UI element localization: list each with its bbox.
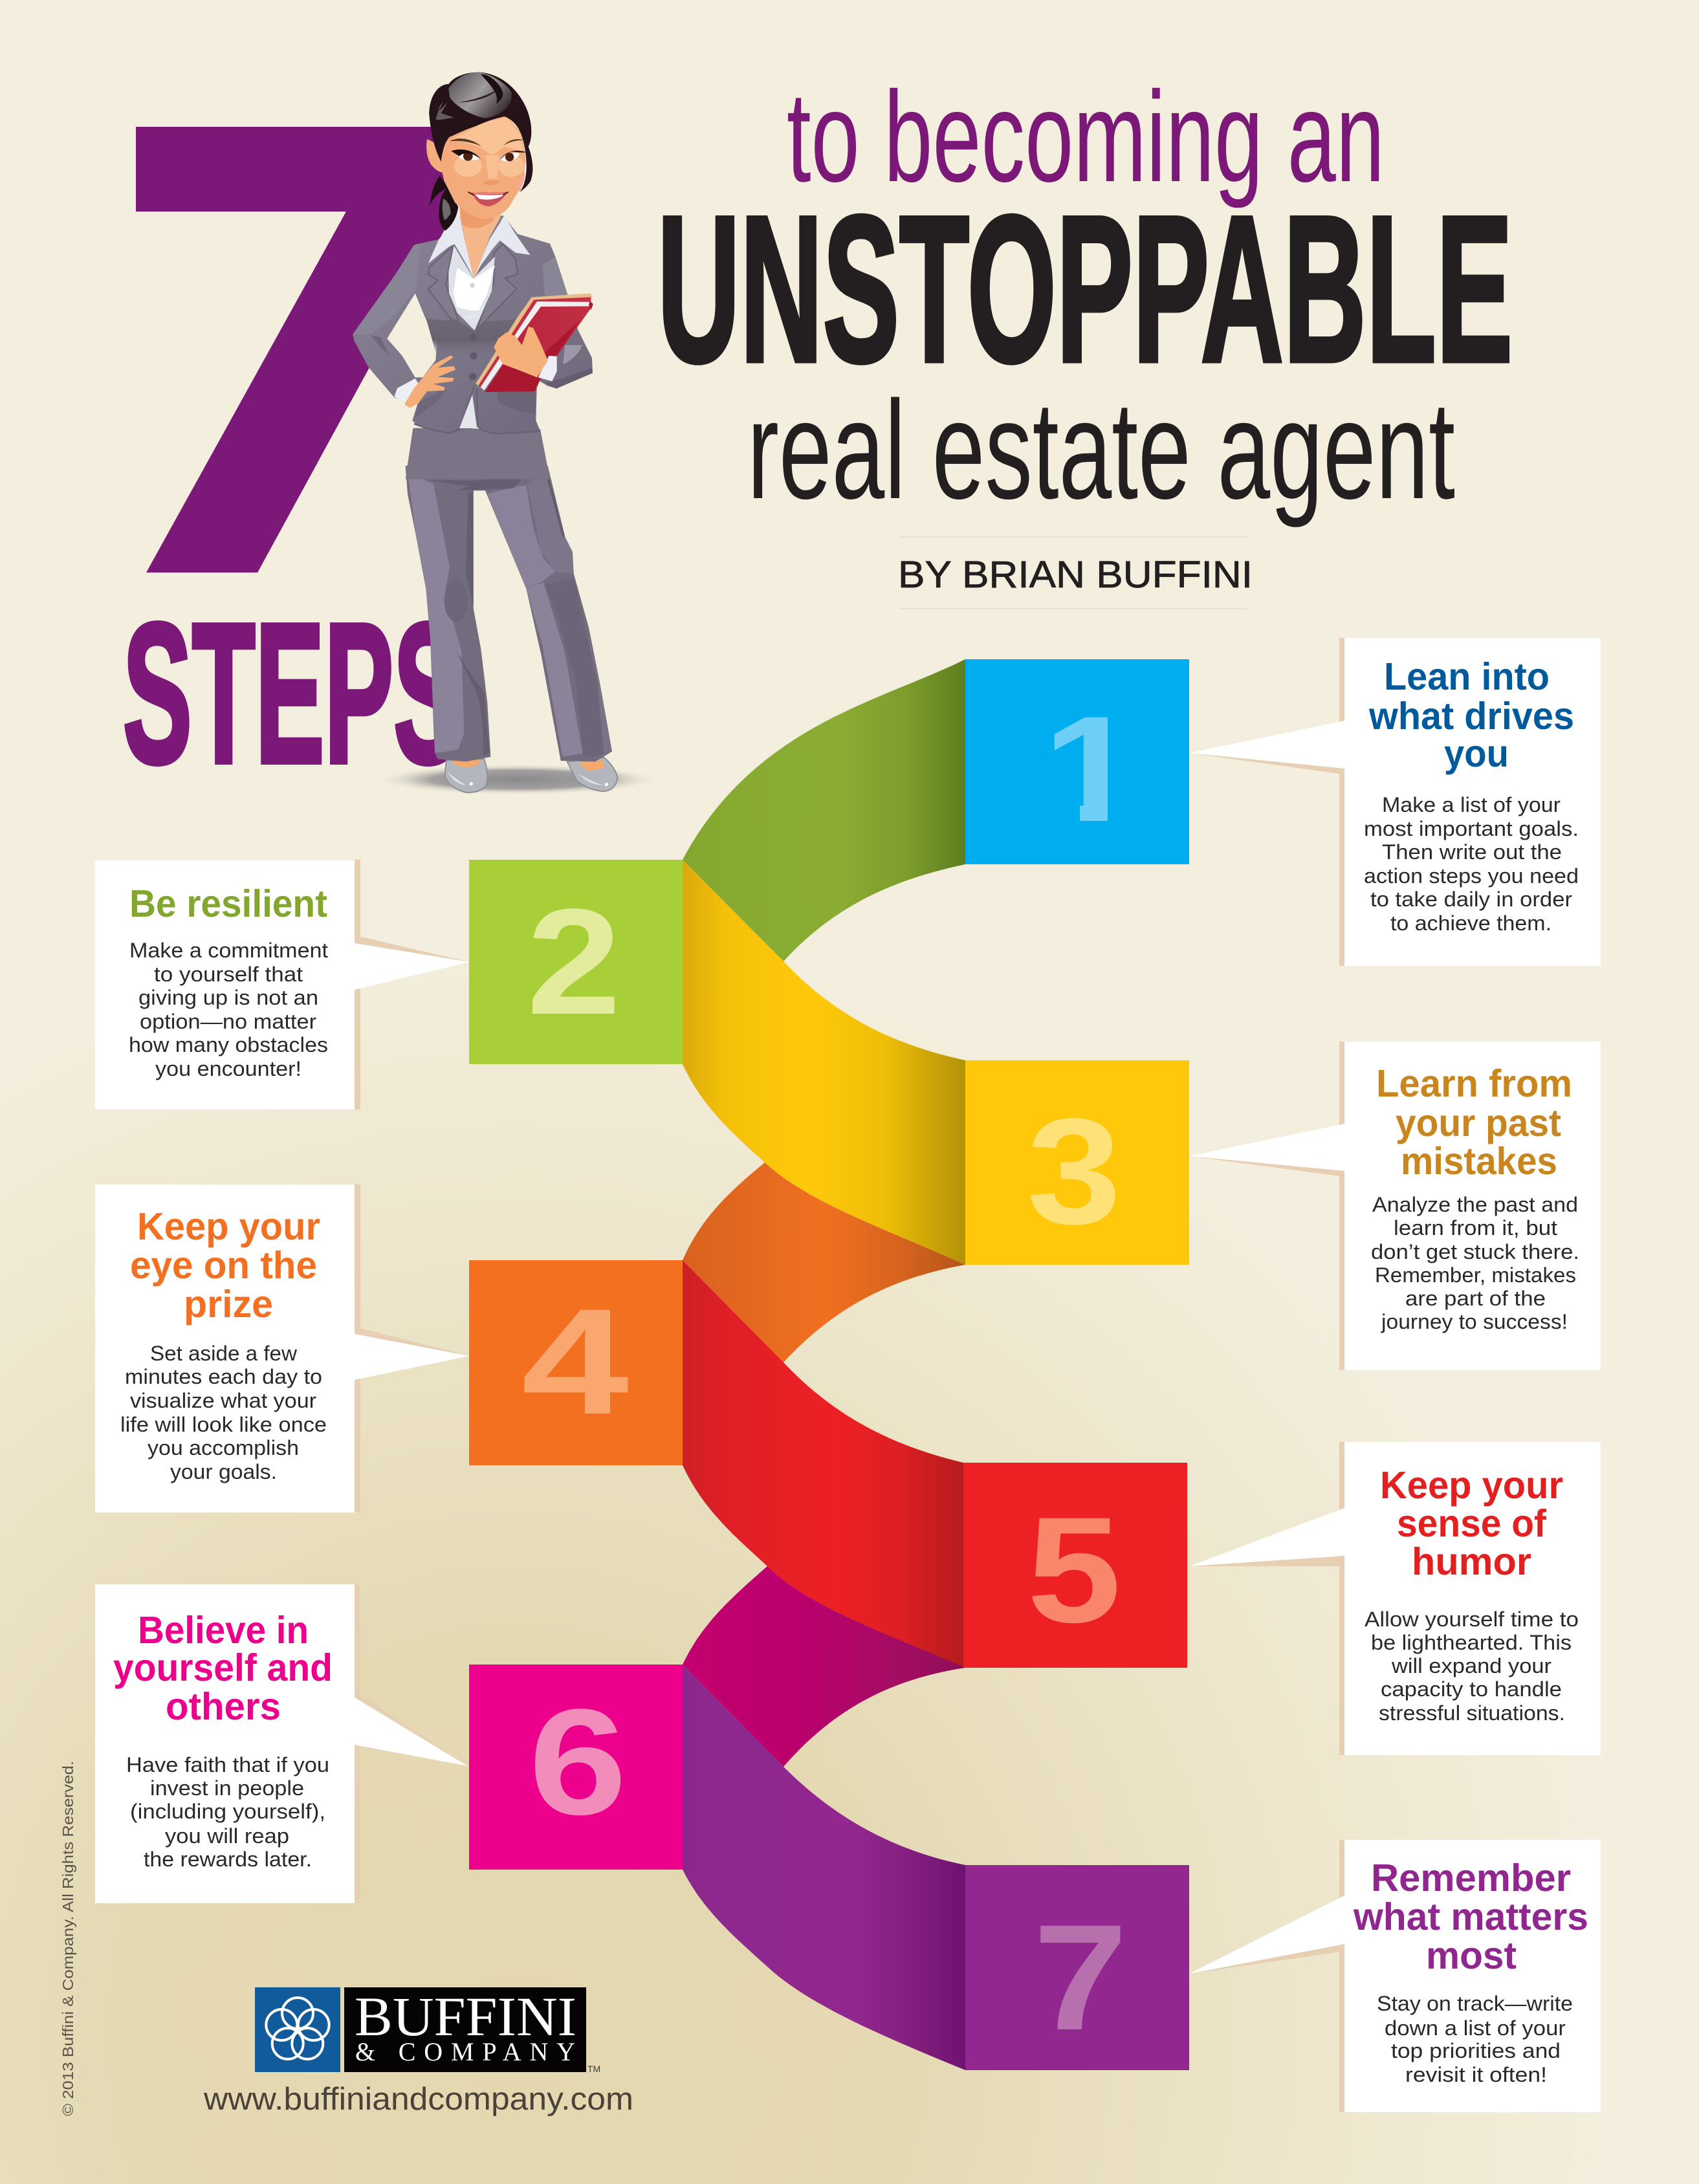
heading: Learn from <box>1376 1062 1572 1105</box>
step square 4 <box>469 1260 683 1465</box>
body text: visualize what your <box>130 1389 316 1412</box>
buttons <box>470 334 477 341</box>
collar <box>428 214 474 279</box>
step square 5 <box>963 1463 1187 1668</box>
step square 7 <box>965 1865 1189 2070</box>
left hand on hip <box>394 378 419 404</box>
ribbon: yellow 2 to 3 <box>683 860 965 1265</box>
body text <box>1371 1193 1579 1333</box>
ribbon connectors between step squares <box>683 659 965 2070</box>
heading: Lean into <box>1384 655 1550 698</box>
illustration: businesswoman holding books <box>353 72 661 795</box>
body text: most important goals. <box>1364 817 1579 840</box>
step square 1: 1 <box>1042 685 1141 853</box>
heading: mistakes <box>1401 1140 1557 1183</box>
legs and shoes <box>406 466 618 792</box>
byline: BY BRIAN BUFFINI: BY BRIAN BUFFINI <box>898 554 1253 596</box>
eyebrows <box>450 138 481 146</box>
body text <box>1365 1608 1579 1725</box>
heading: you <box>1444 732 1509 775</box>
body text: learn from it, but <box>1394 1216 1557 1239</box>
body text <box>1377 1992 1573 2086</box>
big purple numeral 7: 7 <box>120 0 480 710</box>
body text: (including yourself), <box>130 1800 325 1823</box>
body text: Make a list of your <box>1382 793 1561 816</box>
right hand and cuff <box>538 356 557 381</box>
body text: capacity to handle <box>1381 1677 1562 1701</box>
panel: step 3 callout <box>1189 1042 1601 1370</box>
step square 4: 4 <box>521 1278 629 1446</box>
step square 2 <box>469 860 683 1064</box>
body text: giving up is not an <box>138 986 318 1009</box>
heading: others <box>166 1685 281 1728</box>
panel: step 5 callout <box>1189 1442 1601 1755</box>
wordmark: & COMPANY <box>355 2037 575 2066</box>
body text: stressful situations. <box>1379 1701 1565 1725</box>
heading <box>1380 1464 1563 1583</box>
books <box>476 293 593 386</box>
step square 2: 2 <box>527 878 621 1046</box>
panel: step 4 callout <box>95 1185 469 1512</box>
logo: Buffini & Company <box>255 1985 600 2074</box>
body text: life will look like once <box>120 1413 327 1436</box>
body text: you encounter! <box>155 1057 301 1080</box>
ribbon: orange 4 to 3 <box>683 1163 965 1362</box>
body text <box>120 1342 327 1483</box>
body text: Set aside a few <box>150 1342 298 1365</box>
shirt <box>448 246 495 331</box>
body text: Then write out the <box>1382 840 1562 864</box>
heading <box>130 1205 320 1326</box>
wordmark: BUFFINI <box>355 1985 576 2047</box>
ribbon: red 4 to 5 <box>683 1260 963 1668</box>
ribbon: green 2 to 1 <box>683 659 965 961</box>
heading: Be resilient <box>129 882 327 925</box>
heading: Remember <box>1371 1857 1571 1899</box>
heading: humor <box>1412 1540 1531 1583</box>
body text: invest in people <box>150 1776 304 1800</box>
step square 3 <box>965 1060 1189 1265</box>
eyes <box>457 153 480 160</box>
heading: Keep your <box>137 1205 320 1248</box>
big purple numeral 7 <box>136 127 446 573</box>
body text: be lighthearted. This <box>1371 1631 1572 1654</box>
body text: top priorities and <box>1391 2039 1561 2062</box>
heading: STEPS: STEPS <box>123 582 463 805</box>
nose <box>483 180 499 185</box>
panel: step 1 callout <box>1189 638 1601 966</box>
ribbon: magenta 6 to 5 <box>683 1566 965 1767</box>
step square 7: 7 <box>1033 1894 1128 2062</box>
body text: Stay on track—write <box>1377 1992 1573 2015</box>
floor shadow <box>374 764 661 795</box>
heading: your past <box>1396 1102 1561 1144</box>
body text: to yourself that <box>154 963 303 986</box>
heading: sense of <box>1397 1502 1546 1545</box>
step square 3: 3 <box>1027 1087 1121 1256</box>
body text: option—no matter <box>140 1010 316 1033</box>
body text: are part of the <box>1405 1287 1546 1310</box>
wordmark <box>344 1985 600 2074</box>
panel: step 6 callout <box>95 1584 468 1903</box>
ribbon: purple 6 to 7 <box>683 1665 965 2070</box>
body text: you will reap <box>165 1824 289 1848</box>
copyright notice: © 2013 Buffini & Company. All Rights Reserved. <box>60 1761 76 2116</box>
head and hair <box>426 72 532 231</box>
step square 6: 6 <box>529 1678 627 1846</box>
heading <box>1368 655 1574 775</box>
heading: Believe in <box>138 1609 309 1652</box>
heading <box>1376 1062 1572 1183</box>
wordmark: TM <box>587 2064 600 2074</box>
heading: most <box>1426 1934 1517 1977</box>
body text: to achieve them. <box>1390 912 1551 935</box>
body text: how many obstacles <box>129 1033 328 1056</box>
panel: step 2 callout <box>95 860 469 1109</box>
jacket hem <box>414 386 474 433</box>
step square 5: 5 <box>1027 1486 1121 1654</box>
heading: eye on the <box>130 1244 317 1287</box>
body text: your goals. <box>170 1460 277 1483</box>
body text: revisit it often! <box>1405 2063 1547 2086</box>
title: to becoming an: to becoming an <box>787 65 1385 209</box>
suit jacket and torso <box>353 192 593 479</box>
body text: Remember, mistakes <box>1375 1263 1576 1287</box>
body text: don’t get stuck there. <box>1371 1240 1579 1263</box>
website URL: www.buffiniandcompany.com <box>203 2082 633 2117</box>
body text <box>126 1753 329 1871</box>
heading: Keep your <box>1380 1464 1563 1507</box>
body text: journey to success! <box>1381 1310 1568 1333</box>
step square 6 <box>469 1665 683 1870</box>
heading: prize <box>184 1283 273 1326</box>
heading: yourself and <box>113 1646 333 1689</box>
body text: Have faith that if you <box>126 1753 329 1776</box>
body text <box>1364 793 1579 935</box>
step square 1 <box>965 659 1189 864</box>
body text: the rewards later. <box>144 1848 312 1871</box>
heading <box>1353 1857 1588 1977</box>
heading: what drives <box>1368 695 1574 737</box>
lapels <box>428 246 458 320</box>
heading: what matters <box>1353 1895 1588 1938</box>
body text: will expand your <box>1391 1654 1551 1677</box>
panel: step 7 callout <box>1189 1840 1601 2112</box>
body text: down a list of your <box>1385 2016 1566 2040</box>
body text: Make a commitment <box>129 939 328 962</box>
heading <box>113 1609 333 1728</box>
body text: Analyze the past and <box>1372 1193 1578 1216</box>
body text <box>129 939 328 1080</box>
body text: to take daily in order <box>1370 888 1572 911</box>
icon: five interlocking rings <box>255 1987 340 2072</box>
body text: action steps you need <box>1364 864 1579 888</box>
body text: minutes each day to <box>125 1365 322 1388</box>
body text: you accomplish <box>148 1436 299 1459</box>
mouth <box>468 192 509 206</box>
neck and chest <box>458 192 503 279</box>
body text: Allow yourself time to <box>1365 1608 1579 1631</box>
